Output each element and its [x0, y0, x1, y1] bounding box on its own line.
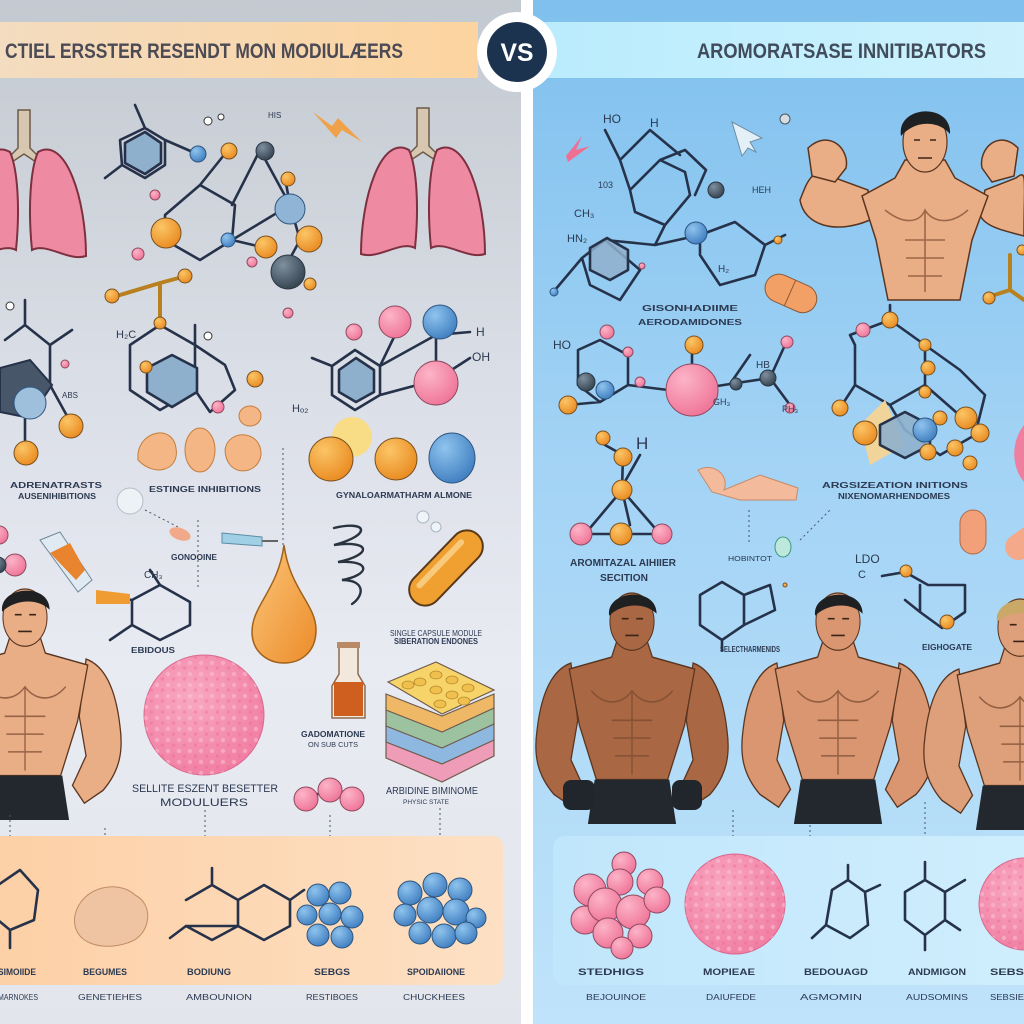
molecule: lower skeleton right: C	[858, 569, 866, 581]
labels: bottom captions right: BEJOUINOE	[586, 993, 646, 1002]
icons: pills right	[960, 510, 1024, 565]
labels: bottom strip right: BEDOUAGD	[804, 967, 869, 977]
molecule: top steroid: CH₃	[574, 208, 594, 220]
icon: orange drop	[252, 545, 316, 663]
labels: bottom captions left: GENETIEHES	[78, 993, 142, 1002]
molecule: pink ball chain: PH₃	[782, 404, 799, 414]
icon: cursor and spark	[566, 114, 790, 162]
labels: bottom strip names: BEGUMES	[83, 967, 127, 977]
labels: bottom strip names: BODIUNG	[187, 967, 231, 977]
molecule: right pink and blue: Hₒ₂	[292, 403, 308, 415]
label: flask: GADOMATIONE	[301, 730, 366, 739]
molecule: left edge: ABS	[62, 391, 78, 400]
labels: bottom captions right	[586, 993, 1024, 1002]
molecule: pink ball chain: GH₃	[713, 397, 730, 407]
molecule: top center: HIS	[268, 111, 281, 120]
label: lower captions: SELECTHARMENIDS	[720, 645, 780, 654]
label: center right caption: ARGSIZEATION INITIONS	[822, 481, 969, 490]
icon: bubbles	[417, 511, 441, 532]
label: stack sub: PHYSIC STATE	[403, 800, 449, 806]
molecule: top steroid: H₂	[718, 264, 729, 275]
label: aromatase second line: AUSENIHIBITIONS	[18, 492, 97, 501]
heading bar: left title: CTIEL ERSSTER RESENDT MON MODIULÆERS	[5, 40, 403, 63]
labels: bottom strip right: STEDHIGS	[578, 967, 644, 977]
panel: bottom strip right	[553, 836, 1024, 985]
icon: layered stack	[386, 662, 494, 782]
vs badge: VS	[500, 39, 534, 67]
label: aromatase stack: ARBIDINE BIMINOME	[386, 786, 478, 797]
label: aromatase amber section: SECITION	[600, 573, 648, 584]
labels: bottom captions left: AMBOUNION	[186, 993, 252, 1002]
figure: muscular man left	[0, 589, 121, 820]
label: selective estrogen receptor modulators	[132, 783, 278, 809]
label: molecule caption: GISONHADIIME	[642, 304, 739, 313]
icon: left lungs	[0, 110, 86, 257]
molecule: center-left orange bonds: H₂C	[116, 329, 136, 341]
molecule: lower skeleton right	[855, 552, 965, 629]
molecules: colored spheres	[309, 417, 475, 483]
molecule: center-left orange bonds	[105, 248, 263, 413]
molecule: top steroid: H	[650, 116, 659, 130]
icon: pink edge shape	[1014, 425, 1024, 482]
label: aromatase amber section: AROMITAZAL AIHIIER	[570, 558, 677, 569]
labels: bottom strip right: ANDMIGON	[908, 967, 966, 977]
label: spheres: GYNALOARMATHARM ALMONE	[336, 491, 473, 500]
molecule: orange cluster right	[832, 305, 989, 470]
icon: peach lump	[75, 887, 148, 946]
figure: flexing man top	[800, 111, 1024, 300]
molecule: lower skeleton right: LDO	[855, 552, 880, 566]
molecule: three pink atoms	[294, 778, 364, 811]
molecule: H skeleton	[570, 431, 672, 545]
label: center right caption: NIXENOMARHENDOMES	[838, 492, 951, 501]
labels: bottom strip right: SEBS	[990, 967, 1024, 977]
icon: large pink sphere	[144, 655, 264, 775]
icon: pink ball	[685, 854, 785, 954]
icon: pink berry cluster	[571, 852, 670, 959]
molecule: top steroid: HN₂	[567, 233, 587, 245]
icon: helix spring	[334, 526, 363, 604]
labels: bottom captions left: RESTIBOES	[306, 993, 358, 1002]
vs badge	[477, 12, 557, 92]
labels: bottom captions right: DAIUFEDE	[706, 993, 756, 1002]
labels: bottom captions left	[0, 993, 465, 1002]
icon: blue cluster	[297, 882, 363, 948]
molecule: bottom skeleton 2	[170, 868, 304, 940]
label: selective estrogen receptor modulators: SELLITE ESZENT BESETTER	[132, 783, 278, 795]
molecule: top steroid: 103	[598, 180, 613, 190]
labels: bottom strip names: SEBGS	[314, 967, 350, 977]
icon: orange pill	[761, 270, 821, 317]
icon: right lungs	[361, 108, 485, 255]
labels: bottom strip names	[0, 967, 465, 977]
icons: gloves	[563, 780, 702, 810]
molecule: right pink and blue: H	[476, 325, 485, 339]
molecule: bottom right skeleton 1	[812, 865, 880, 938]
molecule: top steroid: HO	[603, 112, 621, 126]
labels: bottom captions right: SEBSIE	[990, 993, 1024, 1002]
label: selective estrogen receptor modulators: MODULUERS	[160, 797, 248, 809]
connector lines	[10, 808, 440, 845]
molecule: lower skeleton left	[700, 582, 787, 650]
label: aromatase amber section	[570, 558, 677, 584]
molecule: right pink and blue	[292, 305, 490, 415]
icon: orange capsule	[403, 524, 489, 612]
label: capsule sub: SIBERATION ENDONES	[394, 637, 479, 646]
molecule: bottom skeleton 1	[0, 870, 38, 948]
molecule: right pink and blue: OH	[472, 350, 490, 364]
molecule: pink ball chain	[553, 325, 799, 416]
heading bar: left title	[0, 22, 478, 78]
icon: blue large cluster	[394, 873, 486, 948]
figure: tan man center	[742, 593, 934, 824]
icons: peach organs	[138, 406, 261, 472]
icon: flask	[332, 642, 365, 718]
icon: peach figures	[698, 467, 798, 500]
molecule: center skeleton: EBIDOUS	[131, 646, 176, 655]
panel: bottom strip left	[0, 836, 503, 985]
molecule: right edge	[983, 245, 1024, 304]
label: lower captions: EIGHOGATE	[922, 643, 973, 652]
icon: pink ball edge	[979, 858, 1024, 950]
molecule: H skeleton: H	[636, 434, 648, 453]
labels: bottom captions left: CHUCKHEES	[403, 993, 465, 1002]
icon: teal drop	[775, 537, 791, 557]
molecule: center skeleton: CH₃	[144, 570, 163, 581]
connectors right	[733, 510, 925, 845]
figure: blond man right edge	[924, 599, 1024, 830]
heading bar: right title	[520, 22, 1024, 78]
label: small center: GONOOINE	[171, 553, 218, 562]
molecule: top steroid	[550, 112, 785, 300]
panel: selective estrogen receptor modulators	[0, 0, 521, 1024]
label: small center right: HOBINTOT	[728, 556, 773, 563]
molecule: top center	[105, 105, 322, 318]
label: molecule caption sub: AERODAMIDONES	[638, 318, 743, 327]
molecule: pink ball chain: HO	[553, 338, 571, 352]
labels: bottom captions right: AUDSOMINS	[906, 993, 968, 1002]
labels: bottom captions right: AGMOMIN	[800, 993, 862, 1002]
molecule: center skeleton	[96, 570, 190, 655]
label: flask sub: ON SUB CUTS	[308, 742, 358, 749]
figure: dark man	[536, 593, 728, 824]
panel: aromatase inhibitors	[520, 0, 1024, 1024]
label: aromatase: ADRENATRASTS	[10, 481, 103, 490]
molecule: left atoms	[0, 526, 26, 576]
icon: spark	[313, 112, 362, 142]
molecule: left edge	[0, 300, 83, 465]
molecule: top steroid: HEH	[752, 185, 771, 195]
heading bar: right title: AROMORATSASE INNITIBATORS	[697, 40, 986, 63]
molecule: pink ball chain: HB	[756, 360, 770, 371]
labels: bottom strip right: MOPIEAE	[703, 967, 755, 977]
label: capsule: SINGLE CAPSULE MODULE	[390, 629, 482, 638]
label: center right caption	[822, 481, 969, 501]
label: estrogen inhibitors: ESTINGE INHIBITIONS	[149, 485, 262, 494]
connector lines	[145, 448, 283, 590]
label: lower captions	[720, 643, 973, 654]
molecule: bottom right skeleton 2	[905, 862, 965, 950]
icon: syringe and capsule	[40, 488, 278, 592]
labels: bottom strip names: SPOIDAIIONE	[407, 967, 465, 977]
labels: bottom strip right	[578, 967, 1024, 977]
